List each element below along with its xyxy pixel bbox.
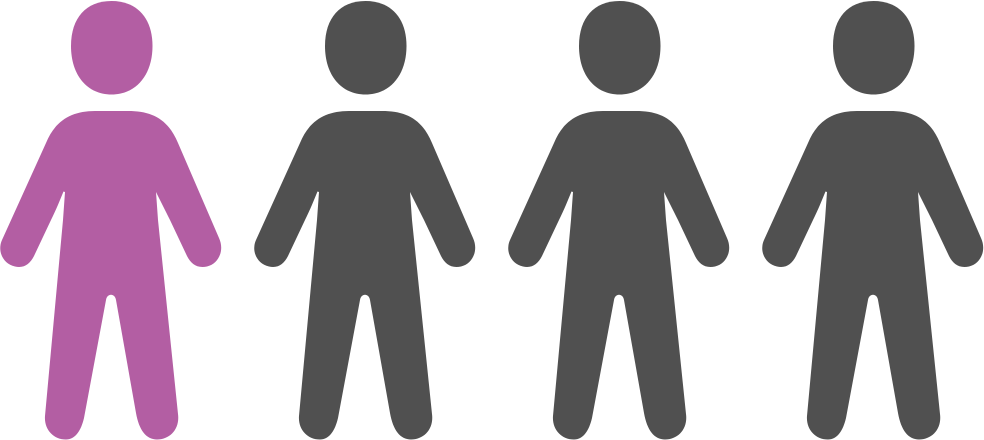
person 4: grey figure xyxy=(762,1,983,440)
person 1: purple figure xyxy=(0,1,221,440)
person 2: grey figure xyxy=(254,1,475,440)
person 3: grey figure xyxy=(508,1,729,440)
